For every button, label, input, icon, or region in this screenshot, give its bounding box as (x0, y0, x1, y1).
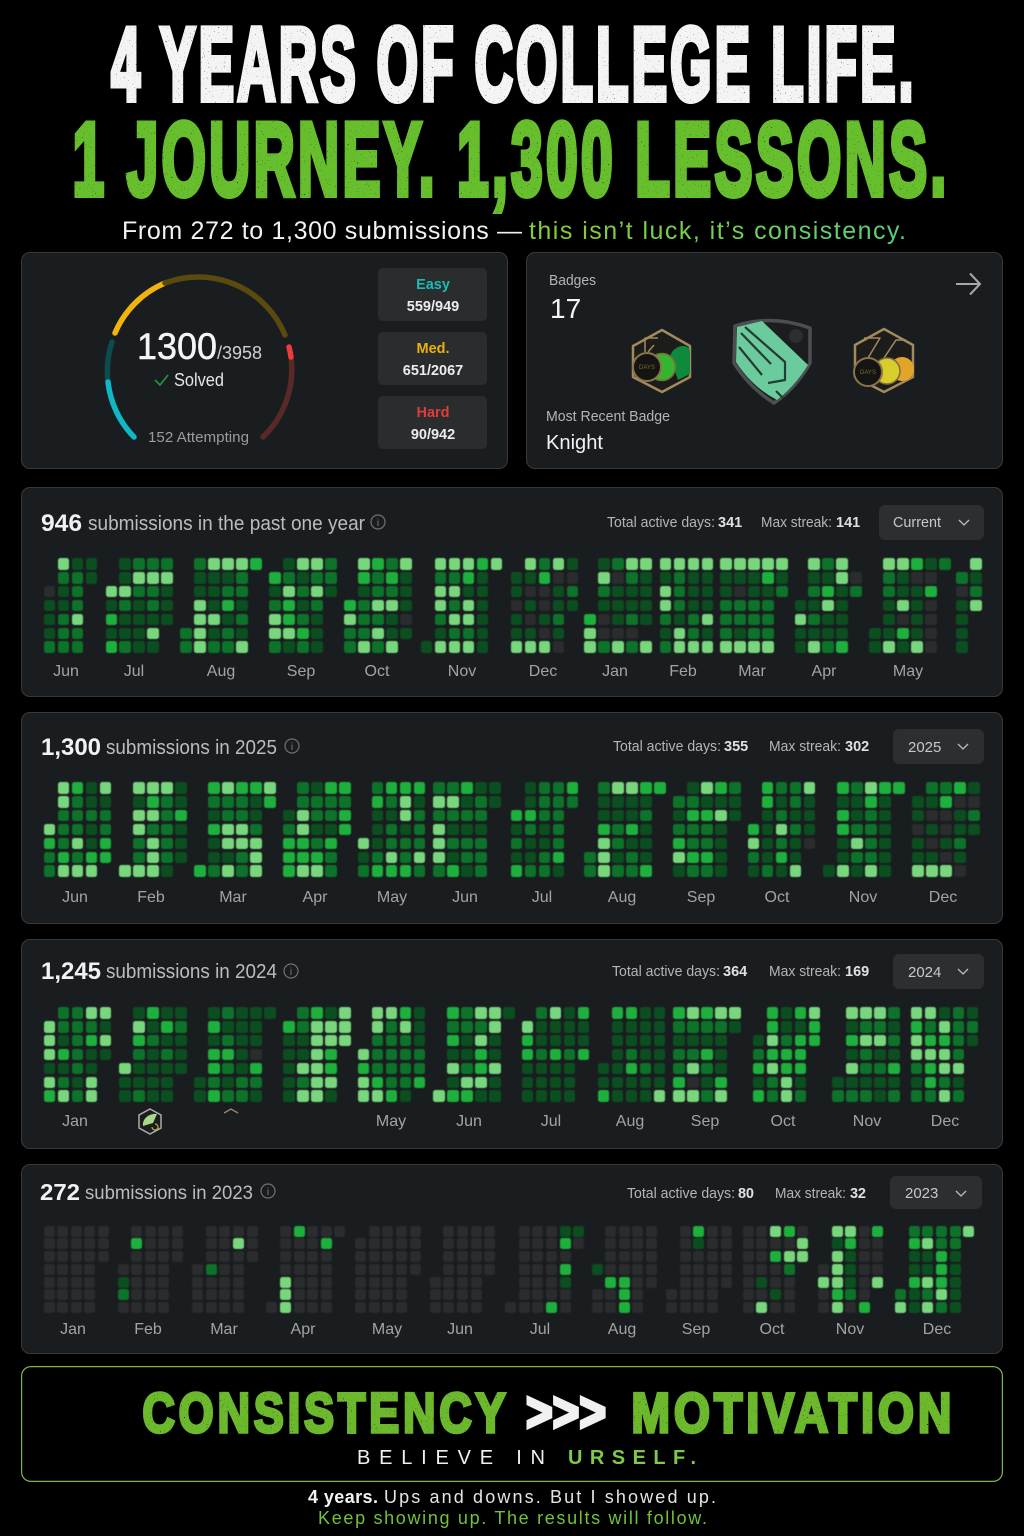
month: Apr (282, 781, 352, 878)
month labels: Jun (447, 1321, 473, 1338)
month: Dec (895, 1226, 974, 1313)
month: Feb (659, 557, 714, 654)
dropdown (893, 954, 984, 989)
month labels: Nov (853, 1113, 881, 1130)
dropdown (879, 505, 984, 540)
month labels: Aug (608, 889, 636, 906)
dropdown: Current (893, 514, 942, 531)
month: Apr (794, 557, 862, 654)
panel: 2025 (21, 712, 1003, 924)
dropdown: 2024 (908, 964, 941, 981)
stat: max streak: Max streak: (775, 1186, 846, 1202)
month: Aug (180, 557, 263, 654)
icon: knight shield badge (734, 320, 810, 403)
month: Aug (597, 1006, 666, 1103)
month: Jan (583, 557, 653, 654)
heatmap: 2025 (43, 781, 980, 878)
medium stat: 651/2067 (403, 363, 463, 379)
month: Sep (672, 1006, 742, 1103)
month: Jul (505, 1226, 584, 1313)
easy stat (378, 268, 487, 321)
subtitle: this isn’t luck, it’s consistency. (529, 217, 906, 245)
icon: info (261, 1184, 275, 1198)
heatmap: 2024 (43, 1006, 978, 1103)
hard stat: Hard (416, 405, 450, 421)
banner tagline (357, 1447, 696, 1469)
stat: active days: Total active days: (613, 739, 721, 755)
hard stat (378, 396, 487, 449)
icon: arrow (956, 274, 980, 294)
month: Apr (282, 1006, 352, 1103)
month labels: Feb (669, 663, 697, 680)
stat: active days: Total active days: (612, 964, 720, 980)
month labels: Nov (849, 889, 877, 906)
month: Aug (592, 1226, 657, 1313)
footer text (0, 1484, 1024, 1536)
dropdown (893, 729, 984, 764)
month: Dec (911, 1007, 978, 1102)
month labels: Dec (931, 1113, 959, 1130)
month labels: Jul (530, 1321, 550, 1338)
dropdown (890, 1176, 982, 1209)
dropdown: 2023 (905, 1185, 938, 1202)
banner tagline: URSELF. (568, 1447, 696, 1469)
solved count: 1300 (137, 326, 217, 367)
month labels (53, 663, 923, 680)
month labels: May (893, 663, 923, 680)
month: Jun (432, 1006, 516, 1103)
heading: submissions in 2024 (106, 961, 277, 983)
badge name: Knight (546, 432, 603, 454)
heading (41, 734, 277, 761)
heading: submissions in the past one year (88, 513, 365, 535)
banner headline: CONSISTENCY (142, 1381, 510, 1444)
badges label: Badges (549, 272, 596, 289)
month: Apr (266, 1226, 345, 1313)
heading (40, 1179, 253, 1205)
footer line 1: 4 years. (308, 1487, 378, 1507)
icon: mini badge (139, 1109, 161, 1134)
month labels: Aug (616, 1113, 644, 1130)
month: Oct (743, 1226, 808, 1313)
dropdown: 2025 (908, 739, 941, 756)
panel: 2024 (21, 939, 1003, 1149)
stat: active days: 80 (738, 1186, 754, 1202)
heading: 946 (41, 510, 82, 537)
month: Sep (268, 557, 338, 654)
panel: badges (526, 252, 1003, 469)
month: Jul (105, 558, 174, 654)
stat: max streak: 32 (850, 1186, 866, 1202)
month labels (62, 889, 957, 906)
stat: active days: 355 (724, 739, 748, 755)
panel: 2023 (21, 1164, 1003, 1354)
stat: active days: 341 (718, 515, 742, 531)
month labels (60, 1321, 951, 1338)
month labels: Jan (60, 1321, 86, 1338)
month: Jun (44, 557, 98, 654)
progress gauge (107, 277, 292, 437)
month labels: Oct (765, 889, 790, 906)
month labels: Feb (137, 889, 165, 906)
month labels: Mar (738, 663, 766, 680)
month labels: Mar (219, 889, 247, 906)
banner headline: >>> (526, 1380, 606, 1443)
month labels: Oct (771, 1113, 796, 1130)
icon: info: i (267, 1187, 269, 1198)
icon: small chevron (224, 1109, 238, 1113)
month: Jun (43, 781, 112, 878)
banner: consistency (21, 1366, 1003, 1482)
month: Mar (194, 1006, 276, 1103)
icon: right badge: DAYS (860, 370, 876, 376)
month: Jun (430, 1226, 495, 1313)
month: Jul (510, 781, 579, 878)
icon: left badge: DAYS (639, 365, 655, 371)
month labels: Dec (923, 1321, 951, 1338)
subtitle: From 272 to 1,300 submissions — (122, 217, 522, 245)
stat: max streak: 302 (845, 739, 869, 755)
stat: max streak: Max streak: (761, 515, 832, 531)
panel: solved progress (21, 252, 508, 469)
month: Nov (818, 1226, 883, 1313)
month: Jan (43, 1006, 112, 1103)
month: Feb (118, 1006, 188, 1102)
month: Oct (343, 557, 413, 654)
heatmap: 2023 (43, 1226, 983, 1320)
month: Nov (420, 557, 503, 654)
month: Mar (192, 1226, 258, 1313)
month: Jun partial (956, 557, 983, 654)
banner tagline: BELIEVE IN (357, 1447, 545, 1469)
stat: max streak: Max streak: (769, 964, 841, 980)
month labels: Jun (456, 1113, 482, 1130)
medium stat: Med. (416, 341, 450, 357)
month labels: Dec (529, 663, 557, 680)
solved count (137, 326, 262, 367)
heading: 1,300 (41, 734, 101, 761)
stat: active days: Total active days: (607, 515, 715, 531)
month labels: Jul (541, 1113, 561, 1130)
month labels: Mar (210, 1321, 238, 1338)
heading: 272 (40, 1179, 80, 1205)
icon: info: i (377, 518, 379, 529)
month: May (868, 557, 952, 654)
subtitle (122, 217, 906, 245)
heading (41, 958, 277, 985)
month labels: Jun (53, 663, 79, 680)
month: Jun (432, 781, 502, 878)
month labels: Dec (929, 889, 957, 906)
footer line 2: Keep showing up. The results will follow. (318, 1508, 707, 1528)
heading: submissions in 2025 (106, 737, 277, 759)
month: May (355, 1226, 421, 1313)
month: Mar (193, 781, 277, 878)
month labels: Jan (602, 663, 628, 680)
medium stat (378, 332, 487, 385)
icon: left badge (633, 330, 690, 392)
stat: max streak: 169 (845, 964, 869, 980)
month: May (357, 1006, 426, 1103)
title (72, 7, 949, 245)
month: Jan (44, 1226, 109, 1313)
icon: info (285, 739, 299, 753)
month: May (357, 781, 426, 878)
easy stat: Easy (416, 277, 450, 293)
month: Oct (752, 1006, 821, 1103)
month: Mar (719, 557, 789, 654)
badges count: 17 (550, 293, 581, 324)
banner headline (142, 1380, 956, 1444)
month: Jul (521, 1006, 590, 1102)
month labels: May (376, 1113, 406, 1130)
month labels (62, 1113, 959, 1130)
heading: submissions in 2023 (85, 1183, 253, 1204)
month labels: Feb (134, 1321, 162, 1338)
month labels: Sep (687, 889, 715, 906)
icon: info: i (290, 967, 292, 978)
month labels: May (372, 1321, 402, 1338)
month labels: Sep (287, 663, 315, 680)
stat: active days: Total active days: (627, 1186, 735, 1202)
month: Dec (510, 557, 578, 654)
month labels: May (377, 889, 407, 906)
month: Nov (832, 1006, 901, 1102)
month labels: Jun (62, 889, 88, 906)
most recent badge label: Most Recent Badge (546, 408, 670, 425)
month labels: Nov (836, 1321, 864, 1338)
icon: info: i (291, 742, 293, 753)
month labels: Oct (365, 663, 390, 680)
heatmap: past one year (44, 557, 983, 654)
month labels: Jan (62, 1113, 88, 1130)
solved label: Solved (174, 370, 224, 390)
icon: info (371, 515, 385, 529)
icon: right badge (854, 329, 914, 392)
easy stat: 559/949 (407, 299, 459, 315)
hard stat: 90/942 (411, 427, 455, 443)
heading: 1,245 (41, 958, 101, 985)
solved count: /3958 (217, 343, 262, 363)
month labels: Aug (207, 663, 235, 680)
month: Dec (911, 781, 980, 878)
month: Sep (672, 781, 742, 878)
month labels: Sep (682, 1321, 710, 1338)
month labels: Jul (124, 663, 144, 680)
month: Feb (118, 781, 188, 878)
month labels: Jul (532, 889, 552, 906)
month labels: Aug (608, 1321, 636, 1338)
month: Feb (118, 1226, 183, 1313)
icon: info (284, 964, 298, 978)
month: Nov (822, 781, 906, 878)
month labels: Apr (812, 663, 837, 680)
month: Sep (666, 1226, 732, 1313)
month labels: Oct (760, 1321, 785, 1338)
heading (41, 510, 365, 537)
attempting label: 152 Attempting (148, 429, 249, 446)
month: Aug (584, 781, 667, 878)
month labels: Jun (452, 889, 478, 906)
solved label (155, 370, 224, 390)
month labels: Sep (691, 1113, 719, 1130)
month labels: Apr (291, 1321, 316, 1338)
month labels: Apr (303, 889, 328, 906)
stat: max streak: Max streak: (769, 739, 841, 755)
stat: max streak: 141 (836, 515, 860, 531)
stat: active days: 364 (723, 964, 747, 980)
month labels: Nov (448, 663, 476, 680)
panel: past one year (21, 487, 1003, 697)
footer line 1: Ups and downs. But I showed up. (384, 1487, 716, 1507)
month: Oct (747, 781, 816, 878)
